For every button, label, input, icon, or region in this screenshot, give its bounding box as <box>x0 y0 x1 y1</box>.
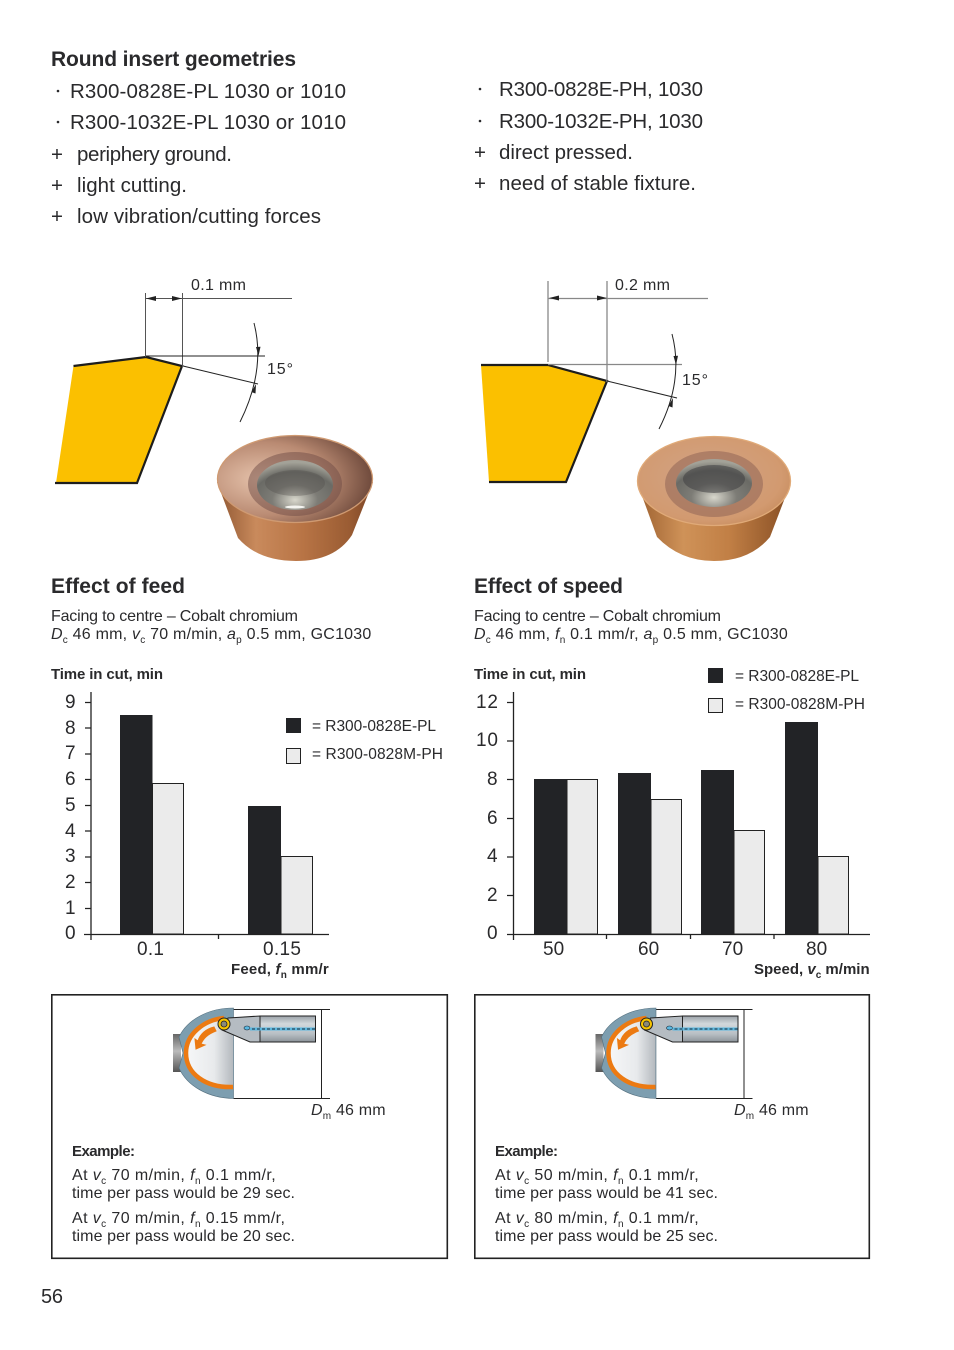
bar chart: effect of speed: 6 <box>487 808 498 829</box>
label: Dm 46 mm: D <box>734 1102 746 1119</box>
text block: right insert list: R300-0828E-PH, 1030 <box>499 78 703 101</box>
bar chart: effect of speed <box>474 666 870 981</box>
bar chart: effect of speed: 10 <box>476 730 498 751</box>
text block: speed example <box>495 1143 718 1245</box>
heading: effect of feed: Effect of feed <box>51 575 185 598</box>
text block: feed example: 70 m/min, <box>107 1167 190 1184</box>
text block: feed example: time per pass would be 20 sec. <box>72 1228 295 1245</box>
bar chart: effect of feed: 0.15 <box>263 939 301 960</box>
text block: speed test conditions: p <box>653 635 659 646</box>
text block: speed test conditions: 46 mm, <box>491 626 555 643</box>
bar chart: effect of feed: Time in cut, min <box>51 666 163 683</box>
bar chart: effect of speed: 80 <box>806 939 827 960</box>
text block: right insert list: R300-1032E-PH, 1030 <box>499 110 703 133</box>
icon: circular interpolation tool <box>173 1008 330 1098</box>
text block: left insert list: + <box>51 143 63 166</box>
text block: feed example: c <box>101 1176 107 1187</box>
heading: round insert geometries: Round insert geometries <box>51 48 296 71</box>
text block: right insert list <box>474 78 703 195</box>
panel: speed example <box>475 995 869 1258</box>
bar chart: effect of feed: 4 <box>65 821 76 842</box>
text block: feed test conditions: c <box>140 635 145 646</box>
bar chart: effect of speed: 0 <box>487 923 498 944</box>
text block: speed example: f <box>613 1167 619 1184</box>
heading: effect of speed: Effect of speed <box>474 575 623 598</box>
text block: feed example: At v <box>72 1210 101 1227</box>
text block: feed example <box>72 1143 295 1245</box>
text block: feed example: At v <box>72 1167 101 1184</box>
bar chart: effect of feed: mm/r <box>287 961 329 978</box>
bar chart: effect of feed: 0 <box>65 923 76 944</box>
text block: speed test conditions: n <box>560 635 565 646</box>
bar chart: effect of speed: = R300-0828M-PH <box>735 696 865 713</box>
text block: feed test conditions: c <box>63 635 68 646</box>
text block: speed example: c <box>524 1176 530 1187</box>
text block: speed example: time per pass would be 41 sec. <box>495 1185 718 1202</box>
bar chart: effect of feed: 3 <box>65 846 76 867</box>
text block: right insert list: direct pressed. <box>499 141 633 164</box>
label: Dm 46 mm: 46 mm <box>331 1102 386 1119</box>
text block: speed example: At v <box>495 1167 524 1184</box>
text block: feed example: n <box>195 1219 201 1230</box>
text block: feed test conditions: 70 m/min, <box>145 626 227 643</box>
text block: speed test conditions: f <box>555 626 561 643</box>
bar chart: effect of speed: 12 <box>476 692 498 713</box>
text block: feed test conditions: 0.5 mm, GC1030 <box>242 626 372 643</box>
diagram: 0.1 mm chamfer geometry: 15° <box>267 361 293 378</box>
panel: feed example <box>52 995 447 1258</box>
bar chart: effect of speed: 50 <box>543 939 564 960</box>
bar chart: effect of speed: m/min <box>821 961 870 978</box>
bar chart: effect of speed: c <box>816 970 822 981</box>
text block: speed example: At v <box>495 1210 524 1227</box>
text block: left insert list: R300-1032E-PL 1030 or 1010 <box>70 111 346 134</box>
text block: speed test conditions: 0.1 mm/r, <box>565 626 643 643</box>
text block: right insert list: + <box>474 172 486 195</box>
text block: speed example: 80 m/min, <box>530 1210 613 1227</box>
text block: feed test conditions: v <box>132 626 141 643</box>
text block: speed example: n <box>618 1176 624 1187</box>
text block: speed test conditions: 0.5 mm, GC1030 <box>658 626 788 643</box>
bar chart: effect of feed: 0.1 <box>137 939 164 960</box>
text block: left insert list: low vibration/cutting forces <box>77 205 321 228</box>
text block: left insert list: + <box>51 174 63 197</box>
bar chart: effect of speed: 2 <box>487 885 498 906</box>
bar chart: effect of feed: Feed, f <box>231 961 281 978</box>
text block: feed example: 0.15 mm/r, <box>201 1210 285 1227</box>
bar chart: effect of feed: 8 <box>65 718 76 739</box>
text block: feed test conditions: p <box>236 635 242 646</box>
text block: left insert list: R300-0828E-PL 1030 or 1010 <box>70 80 346 103</box>
bar chart: effect of feed: = R300-0828E-PL <box>312 718 436 735</box>
bar chart: effect of feed: 7 <box>65 743 76 764</box>
text block: speed example: 0.1 mm/r, <box>624 1167 699 1184</box>
diagram: 0.1 mm chamfer geometry <box>55 277 293 483</box>
text block: feed test conditions: a <box>227 626 236 643</box>
icon: round insert photo, right <box>637 436 791 561</box>
text block: left insert list: periphery ground. <box>77 143 232 166</box>
text block: feed example: time per pass would be 29 sec. <box>72 1185 295 1202</box>
bar chart: effect of feed: 2 <box>65 872 76 893</box>
text block: right insert list: need of stable fixture. <box>499 172 696 195</box>
bar chart: effect of speed: = R300-0828E-PL <box>735 668 859 685</box>
text block: feed test conditions: 46 mm, <box>68 626 132 643</box>
diagram: 0.2 mm chamfer geometry: 15° <box>682 372 708 389</box>
text block: feed test conditions <box>51 608 372 646</box>
text block: feed test conditions: D <box>51 626 63 643</box>
text block: speed test conditions: c <box>486 635 491 646</box>
bar chart: effect of speed: 70 <box>722 939 743 960</box>
text block: left insert list <box>51 80 346 228</box>
text block: left insert list: light cutting. <box>77 174 187 197</box>
text block: speed test conditions <box>474 608 788 646</box>
bar chart: effect of speed: Time in cut, min <box>474 666 586 683</box>
text block: speed example: n <box>618 1219 624 1230</box>
text block: feed example: n <box>195 1176 201 1187</box>
text block: feed example: f <box>190 1210 196 1227</box>
text block: feed example: c <box>101 1219 107 1230</box>
text block: speed example: 50 m/min, <box>530 1167 613 1184</box>
text block: feed example: Example: <box>72 1143 135 1160</box>
text block: feed example: f <box>190 1167 196 1184</box>
bar chart: effect of feed: 1 <box>65 898 76 919</box>
bar chart: effect of speed: 60 <box>638 939 659 960</box>
bar chart: effect of feed <box>51 666 443 981</box>
text block: speed test conditions: a <box>643 626 653 643</box>
diagram: 0.1 mm chamfer geometry: 0.1 mm <box>191 277 246 294</box>
text block: right insert list: + <box>474 141 486 164</box>
bar chart: effect of speed: 8 <box>487 769 498 790</box>
text block: speed test conditions: Facing to centre – Cobalt chromium <box>474 608 721 625</box>
text block: speed example: Example: <box>495 1143 558 1160</box>
bar chart: effect of speed: Speed, v <box>754 961 816 978</box>
bar chart: effect of feed: 9 <box>65 692 76 713</box>
diagram: 0.2 mm chamfer geometry: 0.2 mm <box>615 277 670 294</box>
text block: speed example: time per pass would be 25 sec. <box>495 1228 718 1245</box>
text block: feed example: 0.1 mm/r, <box>201 1167 276 1184</box>
label: Dm 46 mm: 46 mm <box>754 1102 809 1119</box>
bar chart: effect of feed: 5 <box>65 795 76 816</box>
text block: speed example: 0.1 mm/r, <box>624 1210 699 1227</box>
page number: 56 <box>41 1286 63 1308</box>
text block: speed test conditions: D <box>474 626 486 643</box>
label: Dm 46 mm: D <box>311 1102 323 1119</box>
text block: speed example: c <box>524 1219 530 1230</box>
text block: speed example: f <box>613 1210 619 1227</box>
text block: feed test conditions: Facing to centre – Cobalt chromium <box>51 608 298 625</box>
text block: feed example: 70 m/min, <box>107 1210 190 1227</box>
bar chart: effect of feed: = R300-0828M-PH <box>312 746 443 763</box>
diagram: 0.2 mm chamfer geometry <box>481 277 708 482</box>
bar chart: effect of feed: n <box>281 970 287 981</box>
label: Dm 46 mm: m <box>746 1111 754 1122</box>
icon: circular interpolation tool <box>596 1008 752 1098</box>
label: Dm 46 mm: m <box>323 1111 331 1122</box>
bar chart: effect of feed: 6 <box>65 769 76 790</box>
bar chart: effect of speed: 4 <box>487 846 498 867</box>
icon: round insert photo, left <box>217 436 373 561</box>
text block: left insert list: + <box>51 205 63 228</box>
